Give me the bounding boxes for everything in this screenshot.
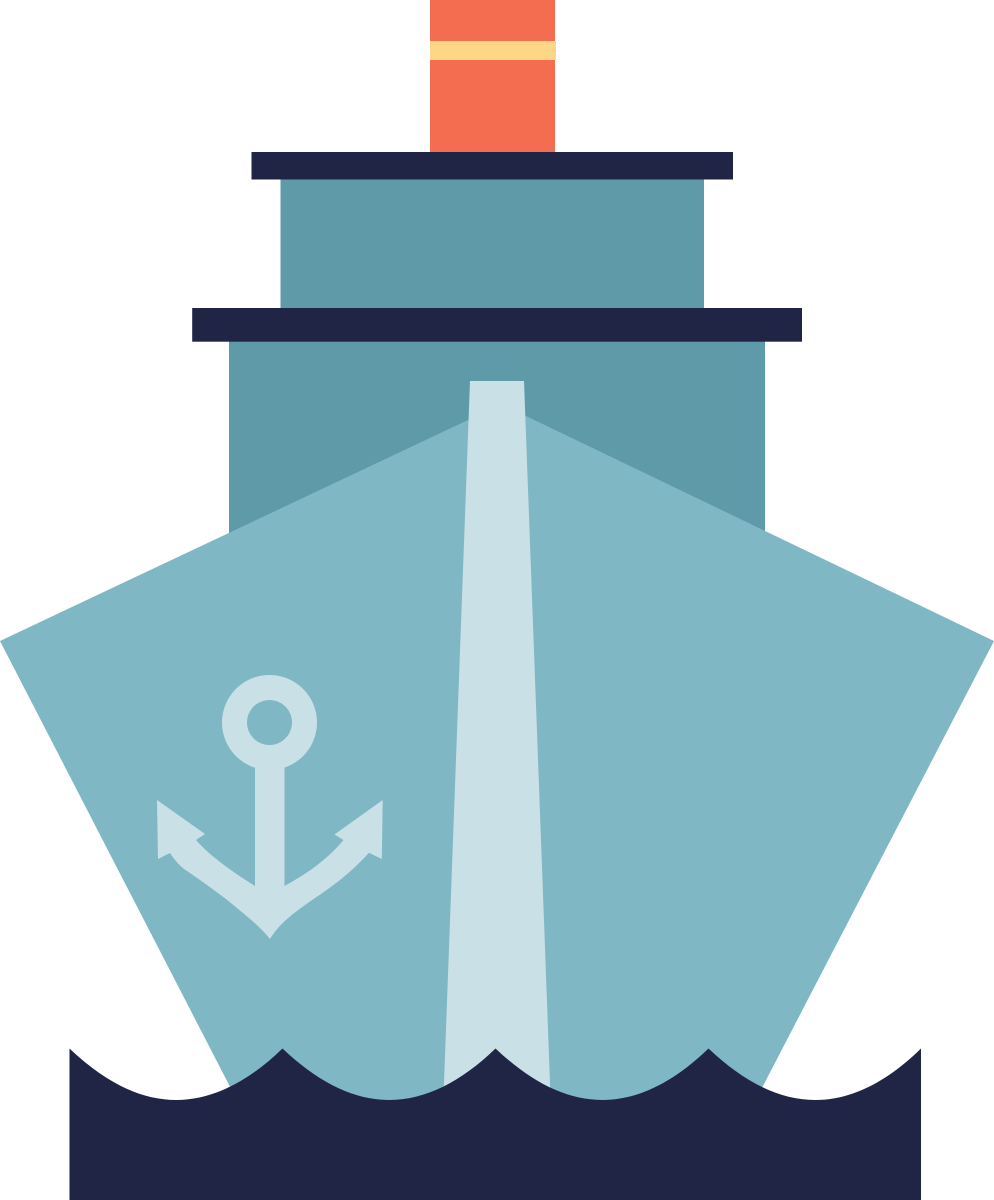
bow stripe	[443, 381, 551, 1110]
upper deck	[252, 152, 733, 180]
lower superstructure	[229, 340, 765, 540]
upper superstructure	[280, 178, 704, 310]
waves	[70, 1048, 921, 1200]
lower deck	[192, 308, 802, 342]
funnel	[430, 0, 556, 153]
hull	[0, 416, 994, 1110]
icon: anchor	[157, 675, 383, 939]
